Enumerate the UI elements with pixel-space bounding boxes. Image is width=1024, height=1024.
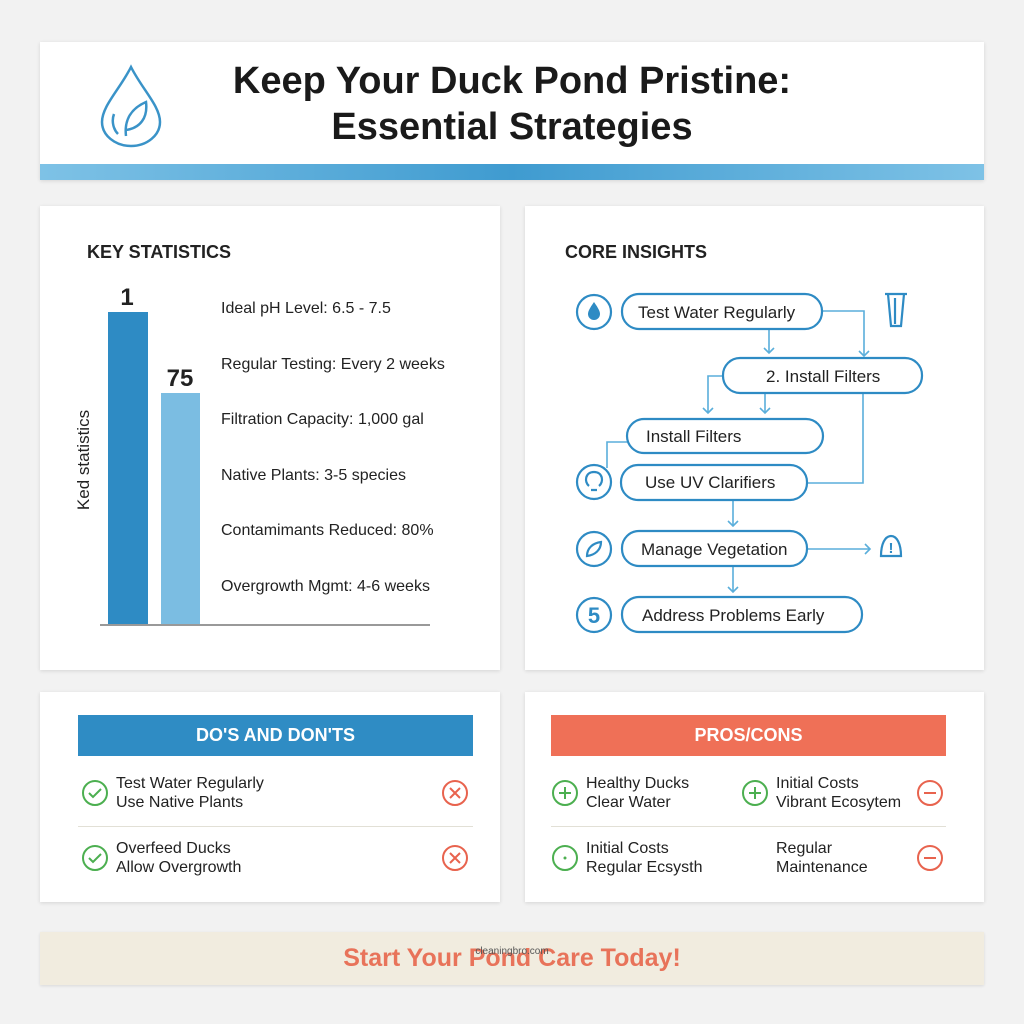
stat list: Overgrowth Mgmt: 4-6 weeks: [221, 578, 430, 595]
panel: pros/cons: [525, 692, 984, 902]
panel: do's and don'ts: Use Native Plants: [116, 794, 243, 811]
heading: CORE INSIGHTS: [565, 242, 707, 262]
flowchart: [576, 292, 924, 634]
call to action banner: cleaningbro.com: [475, 946, 549, 957]
title: [233, 60, 791, 148]
heading: KEY STATISTICS: [87, 242, 231, 262]
bar chart: 75: [167, 365, 193, 392]
stat list: [221, 300, 445, 595]
flowchart: 2. Install Filters: [766, 367, 880, 386]
stat list: Regular Testing: Every 2 weeks: [221, 356, 445, 373]
panel: do's and don'ts: Allow Overgrowth: [116, 859, 241, 876]
panel: do's and don'ts: [40, 692, 500, 902]
flowchart: Test Water Regularly: [638, 303, 796, 322]
panel: pros/cons: Regular: [776, 840, 832, 857]
panel: pros/cons: Initial Costs: [586, 840, 669, 857]
rows: [82, 780, 468, 871]
panel: pros/cons: Maintenance: [776, 859, 868, 876]
header bar: DO'S AND DON'TS: [196, 725, 355, 745]
flowchart: 5: [588, 603, 600, 628]
call to action banner: [40, 932, 984, 985]
flowchart: Install Filters: [646, 427, 741, 446]
stat list: Ideal pH Level: 6.5 - 7.5: [221, 300, 391, 317]
decorative stripe: [40, 164, 984, 180]
bar chart: Ked statistics: [74, 410, 93, 510]
flowchart: !: [888, 540, 894, 557]
title: Keep Your Duck Pond Pristine:: [233, 60, 791, 102]
stat list: Filtration Capacity: 1,000 gal: [221, 411, 424, 428]
header bar: [551, 715, 946, 756]
icon: water drop with leaf: [100, 64, 162, 148]
header bar: PROS/CONS: [694, 725, 803, 745]
panel: do's and don'ts: Overfeed Ducks: [116, 840, 231, 857]
flowchart: Manage Vegetation: [641, 540, 788, 559]
panel: pros/cons: Vibrant Ecosytem: [776, 794, 901, 811]
flowchart: Address Problems Early: [642, 606, 825, 625]
panel: pros/cons: Initial Costs: [776, 775, 859, 792]
panel: do's and don'ts: Test Water Regularly: [116, 775, 264, 792]
bar chart: 1: [120, 284, 134, 311]
call to action banner: Start Your Pond Care Today!: [343, 944, 681, 972]
stat list: Native Plants: 3-5 species: [221, 467, 406, 484]
bar chart: [74, 284, 430, 626]
title: Essential Strategies: [331, 106, 693, 148]
panel: pros/cons: Regular Ecsysth: [586, 859, 702, 876]
panel: key statistics: [40, 206, 500, 670]
panel: pros/cons: Healthy Ducks: [586, 775, 689, 792]
panel: core insights: [525, 206, 984, 670]
header card: [40, 42, 984, 180]
flowchart: Use UV Clarifiers: [645, 473, 775, 492]
header bar: [78, 715, 473, 756]
panel: pros/cons: Clear Water: [586, 794, 671, 811]
stat list: Contamimants Reduced: 80%: [221, 522, 434, 539]
